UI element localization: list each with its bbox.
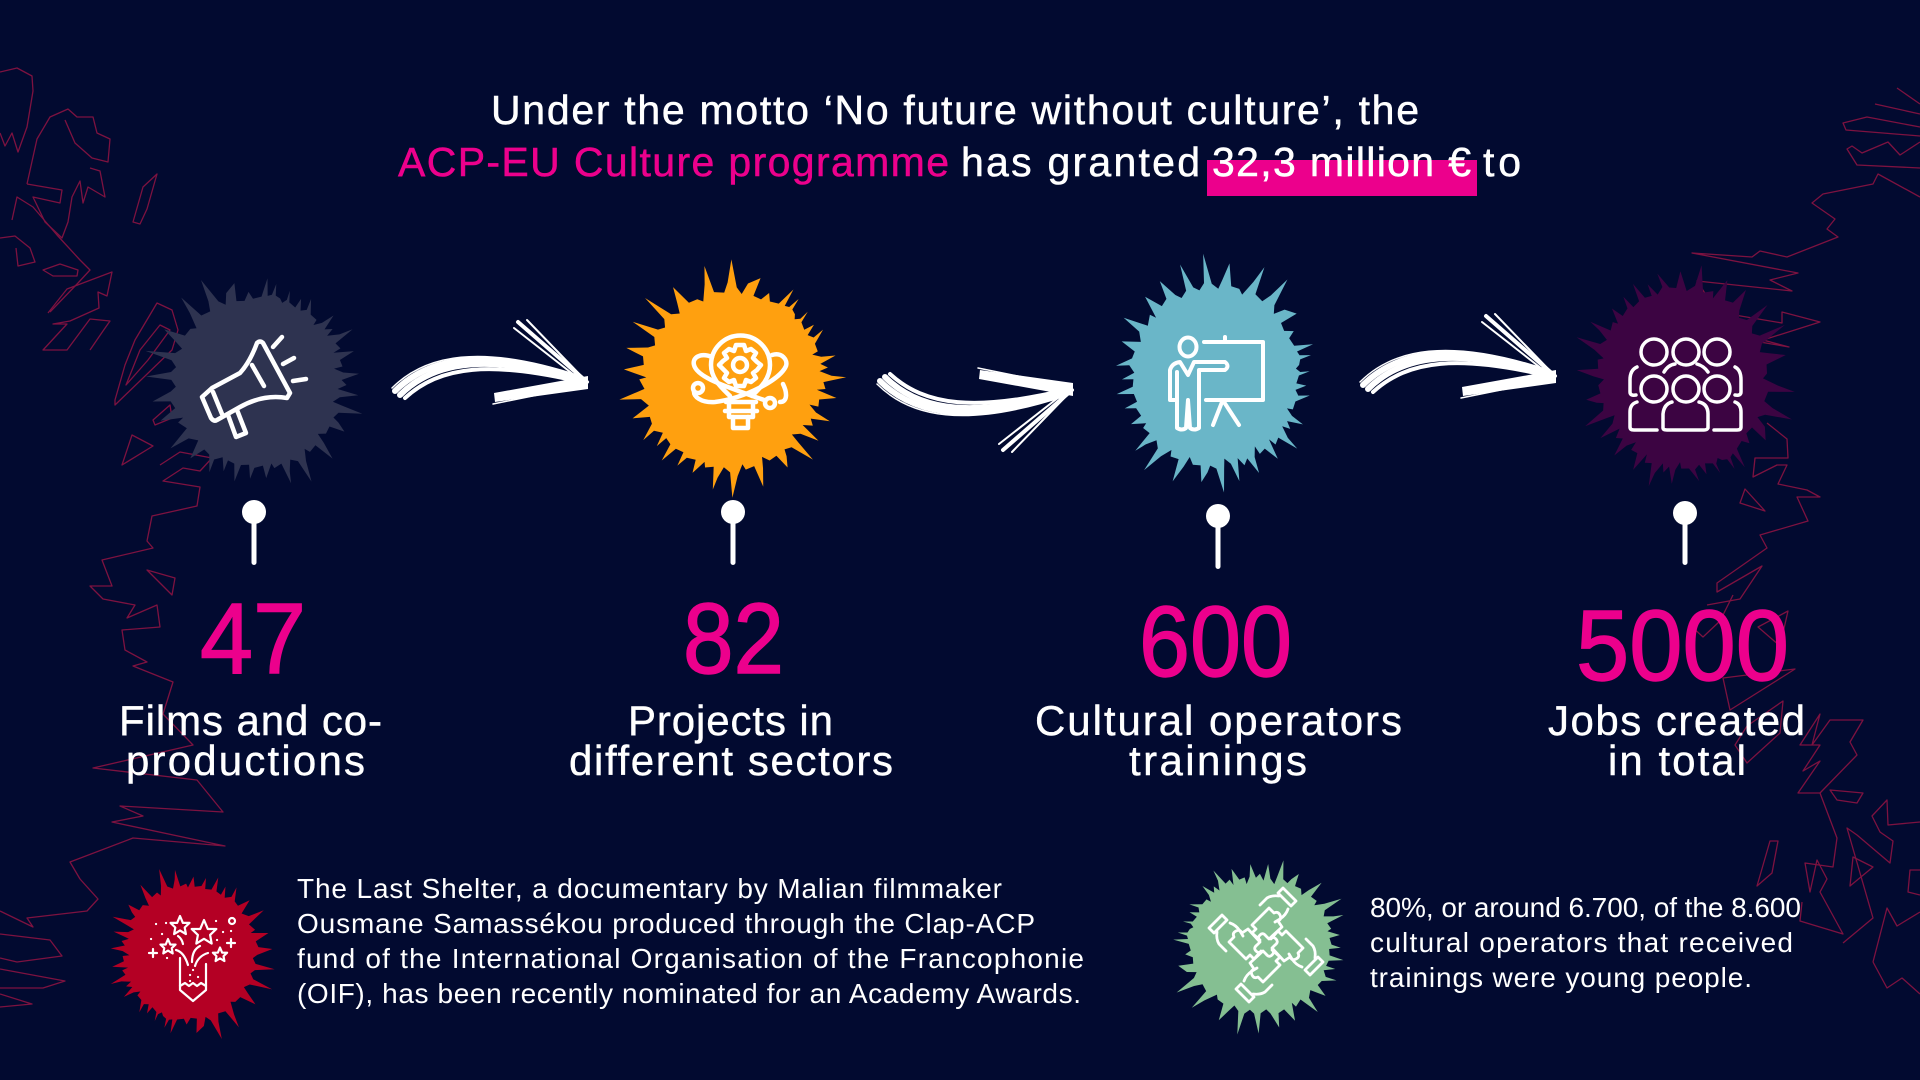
arrow 1 bbox=[392, 320, 588, 404]
label: Films and co- bbox=[119, 697, 382, 744]
label: trainings bbox=[1129, 737, 1307, 784]
icon: lightbulb bbox=[693, 336, 786, 428]
label: productions bbox=[126, 737, 365, 784]
right decorative outlines bbox=[1690, 88, 1920, 994]
splash: dark bbox=[122, 257, 386, 504]
text: The Last Shelter, a documentary by Malian filmmaker bbox=[297, 873, 1002, 904]
label: in total bbox=[1608, 737, 1746, 784]
pin bbox=[1673, 501, 1697, 565]
pin bbox=[721, 500, 745, 565]
title: 32,3 million € bbox=[1212, 139, 1471, 185]
callout: young people bbox=[1159, 844, 1801, 1050]
icon: pencil with stars bbox=[149, 916, 235, 1001]
number: 5000 bbox=[1576, 590, 1789, 702]
text: trainings were young people. bbox=[1370, 962, 1752, 993]
pin bbox=[242, 500, 266, 565]
label bbox=[119, 697, 382, 784]
label: Projects in bbox=[628, 697, 833, 744]
title: to bbox=[1483, 139, 1521, 185]
label: Cultural operators bbox=[1035, 697, 1402, 744]
panel: trainings bbox=[1035, 236, 1402, 784]
panel: jobs bbox=[1539, 224, 1833, 784]
number: 47 bbox=[200, 583, 306, 695]
pin bbox=[1206, 504, 1230, 569]
icon: megaphone bbox=[202, 337, 306, 437]
label bbox=[1035, 697, 1402, 784]
text: (OIF), has been recently nominated for an Academy Awards. bbox=[297, 978, 1081, 1009]
text: 80%, or around 6.700, of the 8.600 bbox=[1370, 892, 1801, 923]
highlight behind amount bbox=[1207, 160, 1477, 196]
icon: presenter bbox=[1170, 337, 1263, 430]
icon: puzzle hands bbox=[1209, 888, 1323, 1002]
text bbox=[1370, 892, 1801, 993]
callout: The Last Shelter bbox=[82, 848, 1084, 1061]
label: Jobs created bbox=[1548, 697, 1805, 744]
title: ACP-EU Culture programme bbox=[398, 139, 949, 185]
text bbox=[297, 873, 1084, 1009]
left decorative outlines bbox=[0, 68, 225, 1007]
number: 600 bbox=[1139, 586, 1292, 698]
splash: purple bbox=[1539, 224, 1833, 531]
label bbox=[569, 697, 893, 784]
label bbox=[1548, 697, 1805, 784]
arrow 2 bbox=[877, 368, 1073, 452]
icon: people bbox=[1630, 339, 1741, 430]
panel: films bbox=[119, 257, 386, 784]
splash: orange bbox=[570, 221, 890, 533]
title: has granted bbox=[961, 139, 1200, 185]
panel: projects bbox=[569, 221, 893, 784]
text: cultural operators that received bbox=[1370, 927, 1793, 958]
splash: teal bbox=[1098, 236, 1333, 510]
text: fund of the International Organisation of the Francophonie bbox=[297, 943, 1084, 974]
arrow 3 bbox=[1360, 314, 1556, 398]
splash: green bbox=[1159, 844, 1359, 1050]
title bbox=[398, 87, 1521, 196]
splash: red bbox=[82, 848, 302, 1061]
label: different sectors bbox=[569, 737, 893, 784]
text: Ousmane Samassékou produced through the Clap-ACP bbox=[297, 908, 1035, 939]
title: Under the motto ‘No future without culture’, the bbox=[491, 87, 1419, 133]
number: 82 bbox=[683, 583, 784, 695]
